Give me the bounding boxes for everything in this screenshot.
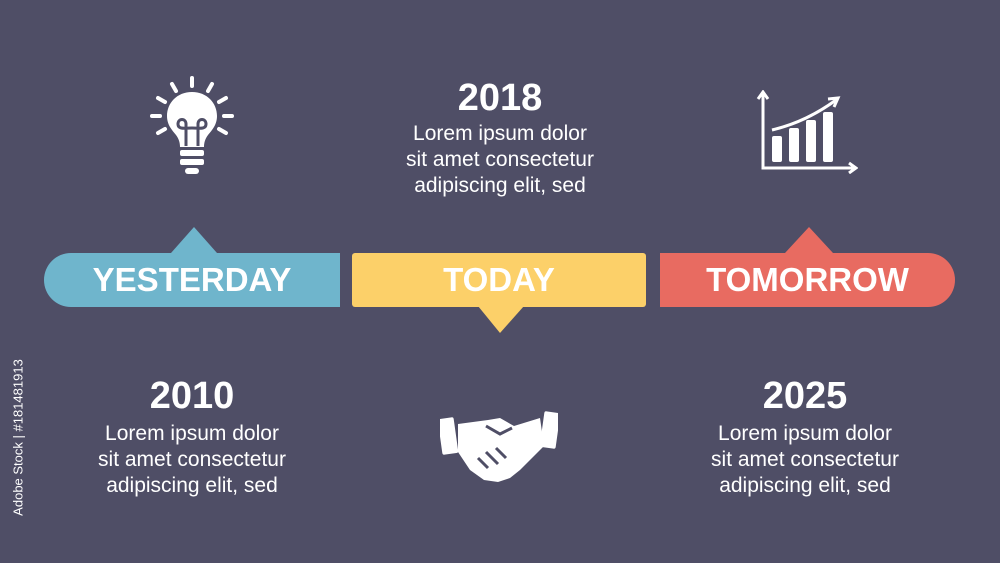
label: tomorrow: TOMORROW: [706, 261, 909, 298]
icon: bar chart: [756, 90, 858, 174]
block: 2010: adipiscing elit, sed: [106, 474, 278, 497]
block: 2010: 2010: [150, 375, 234, 417]
block: 2010: sit amet consectetur: [98, 448, 286, 471]
label: yesterday: [44, 227, 340, 307]
block: 2025: [711, 375, 899, 497]
label: today: [352, 253, 646, 333]
label: today: TODAY: [443, 261, 555, 298]
block: 2025: 2025: [763, 375, 847, 417]
label: tomorrow: [660, 227, 955, 307]
block: 2018: Lorem ipsum dolor: [413, 122, 587, 145]
block: 2018: adipiscing elit, sed: [414, 174, 586, 197]
block: 2010: [98, 375, 286, 497]
icon: light bulb: [150, 76, 234, 174]
icon: handshake: [440, 411, 558, 482]
label: yesterday: YESTERDAY: [93, 261, 291, 298]
block: 2018: 2018: [458, 77, 542, 119]
block: 2025: adipiscing elit, sed: [719, 474, 891, 497]
block: 2018: sit amet consectetur: [406, 148, 594, 171]
block: 2010: Lorem ipsum dolor: [105, 422, 279, 445]
side text: stock id: Adobe Stock | #181481913: [10, 359, 26, 516]
block: 2018: [406, 77, 594, 197]
block: 2025: sit amet consectetur: [711, 448, 899, 471]
block: 2025: Lorem ipsum dolor: [718, 422, 892, 445]
